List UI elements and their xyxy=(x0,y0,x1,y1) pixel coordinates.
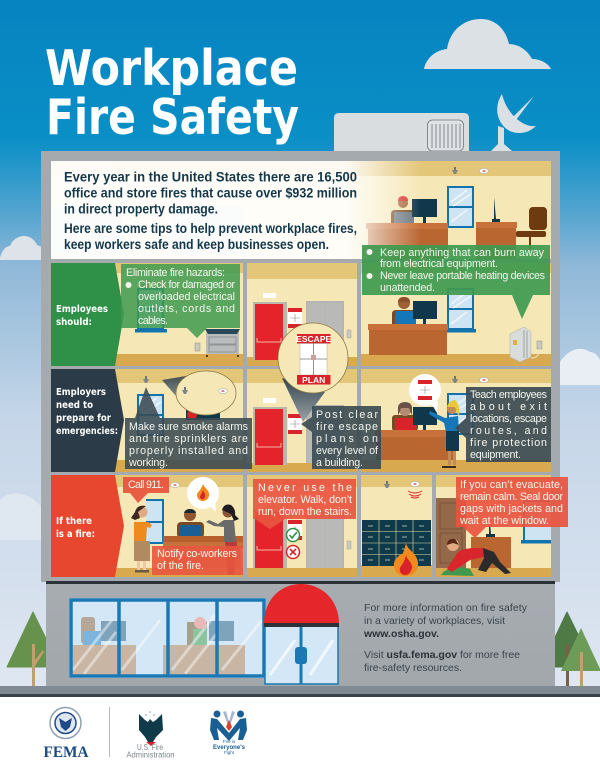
exit sign xyxy=(263,293,276,298)
intro text: in direct property damage. xyxy=(64,200,218,216)
logo: U.S. Fire Administration xyxy=(126,711,174,760)
label: employers need to prepare: prepare for xyxy=(56,413,111,424)
woman on phone xyxy=(131,506,152,572)
desk xyxy=(163,536,243,568)
crawling person xyxy=(441,539,511,576)
elevator xyxy=(306,510,344,568)
callout: teach employees: about exit xyxy=(470,401,547,413)
smoke alarm xyxy=(170,482,180,488)
callout: call 911: Call 911. xyxy=(128,479,164,491)
window xyxy=(447,288,474,330)
more information text: in a variety of workplaces, visit xyxy=(364,615,505,627)
more information text xyxy=(363,602,528,674)
callout: post escape plans: a building. xyxy=(316,457,363,469)
label: if there is a fire xyxy=(51,475,124,577)
label: employees should: Employees xyxy=(56,304,108,315)
cloud: top right xyxy=(424,19,551,69)
elevator button xyxy=(347,541,351,549)
red door xyxy=(253,302,287,360)
label: employees should: should: xyxy=(56,317,92,328)
callout: never use the elevator xyxy=(253,479,356,529)
cloud: left small xyxy=(0,236,42,260)
seated worker xyxy=(392,402,418,431)
elevator xyxy=(306,301,344,359)
pointer beam: escape plan xyxy=(282,378,325,422)
label: employers need to prepare: Employers xyxy=(56,387,106,398)
more information text: Visit usfa.fema.gov for more free xyxy=(364,649,520,661)
desk right xyxy=(476,222,517,259)
window xyxy=(137,394,164,436)
intro text: Here are some tips to help prevent workplace fires, xyxy=(64,220,357,236)
escape plan mini xyxy=(288,520,302,540)
callout: smoke alarms and sprinklers xyxy=(125,387,252,469)
panel: fire room 3 xyxy=(361,475,432,577)
callout: notify coworkers: of the fire. xyxy=(157,560,204,572)
logo: U.S. Fire Administration: Administration xyxy=(126,750,174,760)
callout: cannot evacuate: If you can’t evacuate, xyxy=(460,479,563,491)
callout: eliminate fire hazards: Check for damaged or xyxy=(138,279,235,291)
logo: FEMA: FEMA xyxy=(44,744,89,761)
tree: left xyxy=(7,612,60,686)
window sill xyxy=(135,329,167,332)
filing cabinets xyxy=(362,520,431,566)
magnifier bubble: sprinkler and alarm xyxy=(162,371,236,415)
cloud: right side xyxy=(560,349,600,385)
monitor xyxy=(413,301,437,325)
footer background xyxy=(0,697,600,776)
magnifier bubble: escape plan: PLAN xyxy=(302,375,325,385)
callout: teach employees: routes, and xyxy=(470,425,547,437)
shop windows xyxy=(69,598,266,678)
title: Fire Safety xyxy=(46,89,299,146)
window xyxy=(521,500,551,544)
panel: employees room 1 xyxy=(51,263,243,366)
desk left xyxy=(366,223,448,259)
smoke alarm xyxy=(480,168,488,174)
label: if there is a fire: If there xyxy=(56,516,92,527)
panel: employers room 3 xyxy=(361,369,551,472)
callout: teach employees: locations, escape xyxy=(470,413,547,425)
callout: notify coworkers: Notify co-workers xyxy=(157,548,237,560)
logo: U.S. Fire Administration: U.S. Fire xyxy=(137,743,163,752)
callout: call 911 xyxy=(123,477,169,503)
standing instructor xyxy=(429,400,460,468)
office chair xyxy=(516,207,547,249)
callout: smoke alarms and sprinklers: Make sure smoke alarms xyxy=(129,421,248,433)
divider xyxy=(109,707,110,757)
standing coworker xyxy=(206,505,239,575)
logo: FEMA xyxy=(44,708,89,761)
callout: eliminate fire hazards xyxy=(121,264,240,338)
sidewalk xyxy=(0,686,600,694)
callout: teach employees xyxy=(455,387,551,462)
red door xyxy=(253,407,287,465)
office figure right xyxy=(163,617,245,676)
callout: post escape plans: fire escape xyxy=(316,421,378,433)
office door xyxy=(436,498,466,568)
elevator button xyxy=(347,330,351,338)
label: if there is a fire: is a fire: xyxy=(56,529,95,540)
callout: smoke alarms and sprinklers: properly installed and xyxy=(129,445,248,457)
callout: never use the elevator: Never use the xyxy=(258,482,352,494)
building frame xyxy=(41,151,560,582)
label: employers need to prepare: emergencies: xyxy=(56,426,118,437)
smoke alarm sounding xyxy=(408,481,422,498)
sprinkler xyxy=(384,481,390,488)
exit sign xyxy=(263,398,276,403)
callout: keep away from equipment: Never leave portable heating devices xyxy=(380,270,545,282)
callout: eliminate fire hazards: cables. xyxy=(138,315,168,327)
ghost cabinets 2 xyxy=(172,206,244,254)
icon: elevator cross xyxy=(286,546,300,558)
desk xyxy=(368,324,448,355)
window frame xyxy=(71,600,264,676)
entrance door xyxy=(265,625,338,684)
callout: cannot evacuate: remain calm. Seal door xyxy=(460,491,563,503)
panel: fire room 4 xyxy=(436,475,551,577)
callout: teach employees: equipment. xyxy=(470,449,521,461)
intro text xyxy=(64,168,357,252)
intro text: Every year in the United States there are 16,500 xyxy=(64,168,357,184)
worker and monitor xyxy=(186,408,220,420)
seated worker xyxy=(391,196,414,224)
panel: employers room 2 xyxy=(247,369,357,472)
sprinkler xyxy=(452,167,458,174)
more information text: www.osha.gov. xyxy=(363,628,439,640)
magnifier bubble: escape plan: ESCAPE xyxy=(296,334,332,344)
rooftop satellite dish xyxy=(491,94,536,151)
intro text: office and store fires that cause over $932 million xyxy=(64,184,357,200)
callout: never use the elevator: elevator. Walk, don’t xyxy=(258,494,352,506)
panel: fire room 2 xyxy=(247,475,357,577)
callout: teach employees: fire protection xyxy=(470,437,547,449)
trees: right xyxy=(541,612,600,686)
ground line xyxy=(0,694,600,697)
callout: keep away from equipment: Keep anything that can burn away xyxy=(380,247,545,259)
callout: post escape plans: Post clear xyxy=(316,409,378,421)
magnifier bubble: escape plan xyxy=(278,323,348,393)
callout: cannot evacuate xyxy=(456,477,568,538)
desk xyxy=(471,537,511,568)
label: employers need to prepare xyxy=(51,369,124,472)
callout: keep away from equipment: unattended. xyxy=(380,282,435,294)
cloud: left side lower xyxy=(0,493,41,540)
callout: cannot evacuate: wait at the window. xyxy=(459,515,549,527)
callout: teach employees: Teach employees xyxy=(470,389,547,401)
rooftop air unit xyxy=(334,113,469,151)
ground floor xyxy=(0,581,600,697)
label: employees should xyxy=(51,263,124,366)
intro text: keep workers safe and keep businesses open. xyxy=(64,236,329,252)
window xyxy=(137,288,164,330)
window xyxy=(447,186,474,228)
title: Workplace xyxy=(45,40,298,97)
panel: employees room 3 xyxy=(361,263,551,366)
icon: stairs check xyxy=(286,528,300,542)
seated man xyxy=(177,509,204,538)
sprinkler xyxy=(143,376,149,383)
callout: post escape plans xyxy=(301,406,381,469)
sprinkler xyxy=(452,376,458,383)
callout: post escape plans: every level of xyxy=(316,445,378,457)
desk xyxy=(375,430,455,460)
white overlay xyxy=(51,161,421,259)
bubble: flame xyxy=(187,477,219,512)
window xyxy=(146,499,164,544)
damaged cabinet xyxy=(205,329,240,357)
callout: eliminate fire hazards: Eliminate fire hazards: xyxy=(126,267,225,279)
bubble: escape plan xyxy=(409,374,441,413)
logo: Fire is Everyone's Fight: Fight xyxy=(224,750,235,755)
office figure left xyxy=(72,617,136,676)
callout: post escape plans: plans on xyxy=(316,433,378,445)
label: employers need to prepare: need to xyxy=(56,400,93,411)
seated worker xyxy=(392,297,416,325)
window xyxy=(447,393,474,435)
callout: keep away from equipment xyxy=(362,245,550,319)
side monitor xyxy=(492,197,500,222)
monitor xyxy=(486,513,495,537)
escape plan mini xyxy=(288,414,302,434)
more information text: For more information on fire safety xyxy=(364,602,528,614)
heater outlet and cord xyxy=(531,341,542,358)
logo: Fire is Everyone's Fight xyxy=(210,710,247,755)
callout: cannot evacuate: gaps with jackets and xyxy=(460,503,563,515)
space heater xyxy=(510,327,531,362)
callout: keep away from equipment: from electrical equipment. xyxy=(380,258,498,270)
callout: eliminate fire hazards: overloaded electrical xyxy=(138,291,235,303)
panel: fire room 1 xyxy=(51,475,243,577)
callout: never use the elevator: run, down the stairs. xyxy=(258,506,352,518)
logo: Fire is Everyone's Fight: Fire is xyxy=(223,739,236,744)
monitor xyxy=(413,407,437,431)
more information text: fire-safety resources. xyxy=(364,662,462,674)
monitor xyxy=(412,199,437,223)
outlet xyxy=(195,343,200,351)
callout: eliminate fire hazards: outlets, cords and xyxy=(138,303,235,315)
panel: employers room 1 xyxy=(51,369,243,472)
title xyxy=(45,40,299,146)
escape plan mini xyxy=(288,308,302,328)
panel: intro room xyxy=(51,161,551,259)
red awning xyxy=(264,584,339,627)
callout: notify coworkers xyxy=(152,546,243,575)
red door xyxy=(253,510,287,568)
window sill xyxy=(447,329,476,332)
glass reflections xyxy=(73,615,262,674)
callout: smoke alarms and sprinklers: and fire sprinklers are xyxy=(129,433,248,445)
callout: smoke alarms and sprinklers: working. xyxy=(128,457,168,469)
fire xyxy=(394,543,418,576)
logo: Fire is Everyone's Fight: Everyone's xyxy=(213,745,246,751)
ghost filing cabinets xyxy=(52,206,122,254)
smoke alarm xyxy=(480,377,488,383)
panel: employees room 2 xyxy=(247,263,357,366)
elevator xyxy=(306,405,344,463)
